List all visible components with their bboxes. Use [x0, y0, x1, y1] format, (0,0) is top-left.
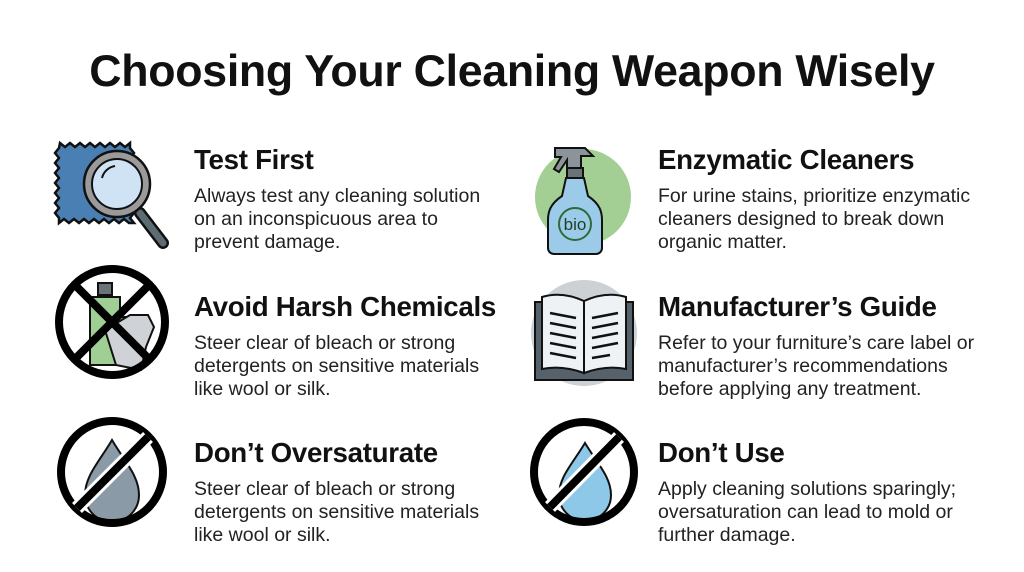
text: manufacturer's guide: Manufacturer’s Guide	[658, 291, 937, 322]
text: don't use	[658, 437, 956, 546]
icon: open book	[531, 280, 637, 386]
text: don't use: Don’t Use	[658, 437, 785, 468]
text: manufacturer's guide	[658, 291, 974, 400]
text: test first	[194, 144, 480, 253]
icon: bio spray bottle	[535, 147, 631, 255]
icon: no water drop	[530, 418, 638, 526]
text: manufacturer's guide: manufacturer’s recommendations	[658, 355, 948, 377]
text: don't oversaturate	[194, 437, 479, 546]
text: don't oversaturate: Steer clear of bleach or strong detergents on sensitive materials like wool or silk.	[194, 478, 479, 546]
text: avoid harsh chemicals	[194, 291, 496, 400]
text: don't oversaturate: Don’t Oversaturate	[194, 437, 438, 468]
text: enzymatic cleaners	[658, 144, 970, 253]
icon: no oversaturate drop	[57, 417, 167, 527]
text: manufacturer's guide: before applying any treatment.	[658, 378, 921, 400]
text: don't use: Apply cleaning solutions sparingly; oversaturation can lead to mold or further damage.	[658, 478, 956, 546]
text: test first: Always test any cleaning solution on an inconspicuous area to prevent damage.	[194, 185, 480, 253]
icon: fabric magnifier	[54, 140, 169, 249]
text: test first: Test First	[194, 144, 314, 175]
text: avoid harsh chemicals: Avoid Harsh Chemicals	[194, 291, 496, 322]
text: avoid harsh chemicals: Steer clear of bleach or strong detergents on sensitive materials like wool or silk.	[194, 332, 479, 400]
text: enzymatic cleaners: For urine stains, prioritize enzymatic cleaners designed to break down organic matter.	[658, 185, 970, 253]
text: enzymatic cleaners: Enzymatic Cleaners	[658, 144, 914, 175]
text: manufacturer's guide: Refer to your furniture’s care label or	[658, 332, 974, 354]
icon: no harsh chemicals	[55, 265, 169, 379]
title: Choosing Your Cleaning Weapon Wisely	[89, 47, 935, 96]
icon: bio spray bottle: bio	[564, 215, 586, 234]
